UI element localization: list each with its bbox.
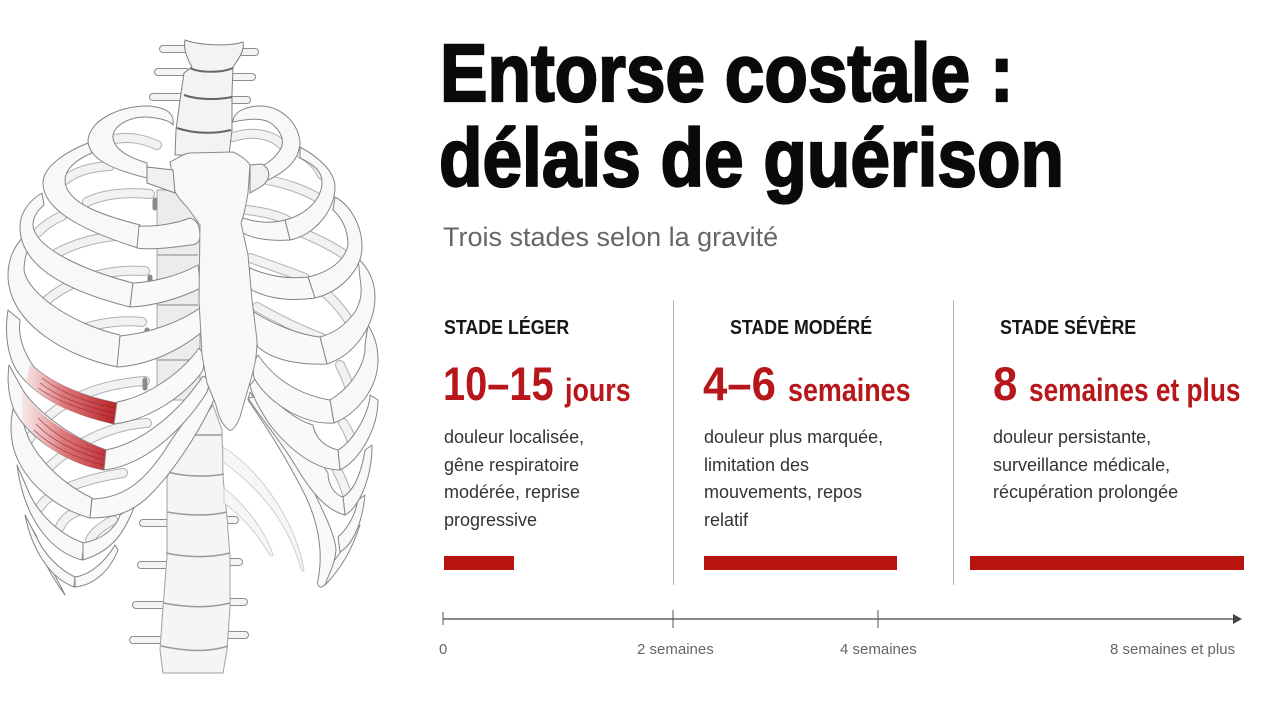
duration unit: semaines: [788, 372, 911, 408]
back ribs: [27, 134, 353, 540]
stage heading: STADE SÉVÈRE: [1000, 317, 1136, 339]
duration value: 4–6: [703, 357, 776, 410]
panel: stade modéré: [703, 316, 911, 570]
duration bar: [444, 556, 514, 570]
panel: stade léger: [443, 316, 631, 570]
divider: [673, 300, 674, 585]
title: Entorse costale :: [440, 28, 1014, 119]
description: modérée, reprise: [444, 482, 580, 502]
description: relatif: [704, 510, 748, 530]
description: mouvements, repos: [704, 482, 862, 502]
timeline label: 2 semaines: 2 semaines: [637, 641, 714, 658]
sternum: [170, 152, 257, 430]
description: [444, 427, 584, 530]
timeline label: 4 semaines: 4 semaines: [840, 641, 917, 658]
description: [704, 427, 883, 530]
duration unit: semaines et plus: [1029, 372, 1240, 408]
duration value: 8: [993, 357, 1017, 410]
stage heading: STADE MODÉRÉ: [730, 317, 872, 339]
timeline label: 8 semaines et plus: 8 semaines et plus: [1110, 641, 1235, 658]
description: gêne respiratoire: [444, 455, 579, 475]
duration value: 10–15: [443, 357, 554, 410]
description: limitation des: [704, 455, 809, 475]
description: douleur plus marquée,: [704, 427, 883, 447]
description: récupération prolongée: [993, 482, 1178, 502]
description: douleur persistante,: [993, 427, 1151, 447]
timeline axis: [442, 610, 1242, 628]
floating ribs right: [223, 447, 304, 571]
description: douleur localisée,: [444, 427, 584, 447]
divider: [953, 300, 954, 585]
description: [993, 427, 1178, 502]
strained ribs highlighted in red: [22, 364, 117, 470]
subtitle: Trois stades selon la gravité: [443, 222, 778, 252]
ribs left: [6, 106, 173, 595]
duration unit: jours: [565, 372, 631, 408]
ribs right: [233, 106, 378, 585]
description: surveillance médicale,: [993, 455, 1170, 475]
description: progressive: [444, 510, 537, 530]
duration bar: [970, 556, 1244, 570]
timeline label: 0: 0: [439, 641, 447, 658]
illustration: rib cage: [6, 39, 378, 674]
stage heading: STADE LÉGER: [444, 317, 569, 339]
clavicular joints: [147, 164, 269, 193]
title line 2: délais de guérison: [439, 113, 1064, 204]
spine: [133, 40, 255, 673]
panel: stade sévère: [970, 316, 1244, 570]
duration bar: [704, 556, 897, 570]
cartilage left: [75, 218, 214, 587]
costal arch right: [241, 218, 345, 587]
